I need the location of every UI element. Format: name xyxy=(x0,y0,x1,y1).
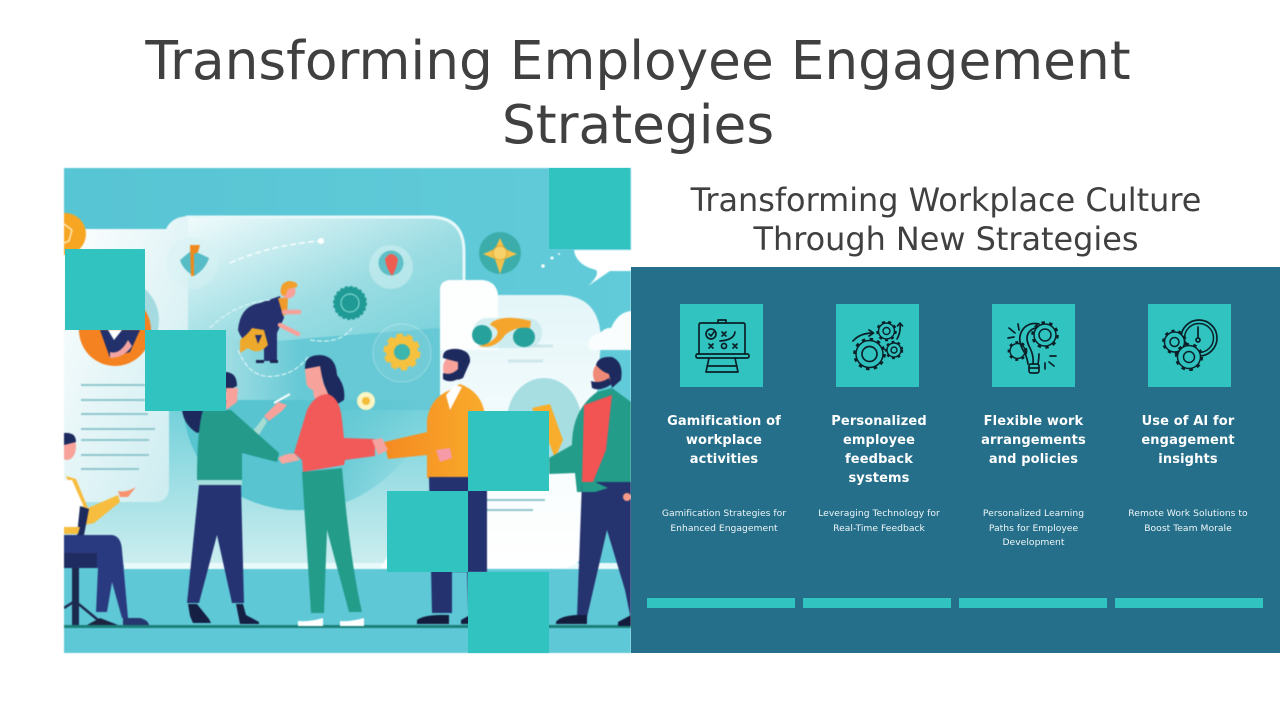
card 4 heading: insights xyxy=(1158,452,1218,467)
card 3 description xyxy=(983,508,1084,548)
orange avatar circle xyxy=(77,279,159,366)
card 3 description: Personalized Learning xyxy=(983,508,1084,519)
icon: personalized gears xyxy=(836,304,919,387)
title xyxy=(145,30,1131,156)
red pin icon xyxy=(369,245,413,289)
worker figure xyxy=(238,281,299,363)
card 2 heading: systems xyxy=(848,471,910,486)
speech bubble and cloud xyxy=(574,250,631,350)
accent square 2 xyxy=(145,330,226,411)
card 1 bar xyxy=(647,598,795,608)
accent square 5 xyxy=(387,491,468,572)
seated man xyxy=(58,433,149,625)
big teal circle xyxy=(182,400,420,510)
teal seal icon xyxy=(334,287,366,319)
card 2 description: Real-Time Feedback xyxy=(833,522,925,534)
subheading: Transforming Workplace Culture xyxy=(691,181,1201,219)
dotted path and dot xyxy=(230,238,324,263)
small flower xyxy=(357,392,375,410)
card 2 heading: employee xyxy=(843,433,915,448)
woman in green xyxy=(182,372,290,624)
subheading xyxy=(690,181,1201,258)
left document xyxy=(64,216,190,502)
card 3 bar xyxy=(959,598,1107,608)
icon: idea bulb with gears xyxy=(992,304,1075,387)
icon: strategy board xyxy=(680,304,763,387)
dashed loop xyxy=(210,300,352,376)
orange badge top-left xyxy=(44,213,86,255)
card 3 description: Paths for Employee xyxy=(989,522,1078,534)
card 3 heading: Flexible work xyxy=(984,414,1083,429)
card 1 description xyxy=(662,508,786,534)
panel: engagement strategies xyxy=(631,267,1280,653)
card 4 description: Boost Team Morale xyxy=(1144,522,1232,534)
card 2 heading: feedback xyxy=(845,452,913,467)
infinity symbol xyxy=(472,318,542,348)
card 1 heading: activities xyxy=(690,452,758,467)
gold compass icon xyxy=(479,232,521,274)
card 3 heading: and policies xyxy=(989,452,1078,467)
accent square 4 xyxy=(468,411,549,491)
card 3 heading xyxy=(981,414,1086,467)
card 3 heading: arrangements xyxy=(981,433,1086,448)
card 1 description: Gamification Strategies for xyxy=(662,508,786,519)
card 2 description: Leveraging Technology for xyxy=(818,508,940,519)
card 1 heading: workplace xyxy=(686,433,762,448)
icon: AI clock gears xyxy=(1148,304,1231,387)
card 2 heading: Personalized xyxy=(831,414,927,429)
large glass panel xyxy=(186,216,465,410)
card 4 heading xyxy=(1141,414,1235,467)
accent square 1 xyxy=(65,249,145,330)
card 2 description xyxy=(818,508,940,534)
card 4 heading: engagement xyxy=(1141,433,1235,448)
card 4 description: Remote Work Solutions to xyxy=(1128,508,1248,519)
card 2 heading xyxy=(831,414,927,486)
card 4 heading: Use of AI for xyxy=(1142,414,1234,429)
flag icon xyxy=(166,237,218,289)
gold gear icon xyxy=(373,324,431,382)
title: Transforming Employee Engagement xyxy=(145,30,1131,92)
accent square 3 xyxy=(549,168,630,249)
card 1 description: Enhanced Engagement xyxy=(670,522,778,534)
small dots xyxy=(541,253,560,268)
subheading: Through New Strategies xyxy=(754,220,1138,258)
card 4 bar xyxy=(1115,598,1263,608)
card 3 description: Development xyxy=(1002,537,1065,548)
card 1 heading xyxy=(667,414,781,467)
man in yellow xyxy=(372,349,487,624)
card 1 heading: Gamification of xyxy=(667,414,781,429)
card 4 description xyxy=(1128,508,1248,534)
background wall and floor xyxy=(64,168,631,653)
illustration: team collaboration xyxy=(63,167,632,654)
title: Strategies xyxy=(502,94,774,156)
man in green jacket xyxy=(532,357,631,626)
white right panel xyxy=(380,280,601,568)
woman in red xyxy=(278,355,375,626)
card 2 bar xyxy=(803,598,951,608)
accent square 6 xyxy=(468,572,549,653)
